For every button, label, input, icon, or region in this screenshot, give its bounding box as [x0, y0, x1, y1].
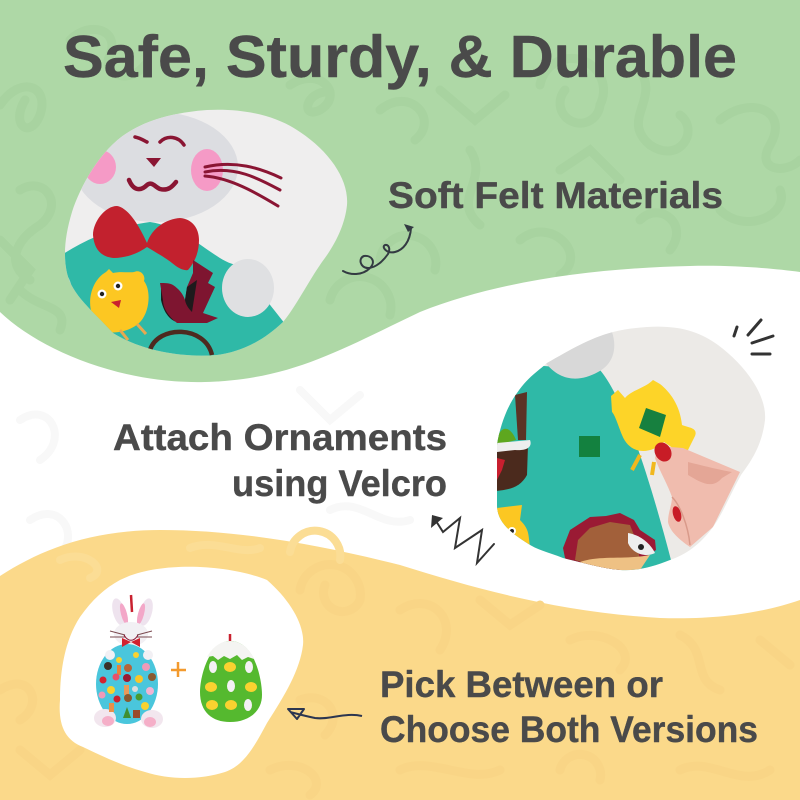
hand: [651, 439, 740, 547]
attention spark lines: [734, 320, 773, 354]
basket: [495, 392, 531, 491]
background: yellow bottom band: [0, 530, 800, 800]
navy arrow: [288, 709, 362, 719]
basket handle: [150, 332, 212, 355]
background: green top band: [0, 0, 800, 400]
zigzag arrow: [431, 515, 494, 563]
white blob: product options: [60, 567, 303, 778]
red bow tie: [93, 206, 199, 270]
pink cheeks: [84, 149, 223, 191]
teal felt egg: [490, 365, 671, 575]
title: Safe, Sturdy, & Durable: [63, 24, 737, 90]
curly arrow: [343, 224, 414, 274]
hedgehog: [563, 513, 656, 572]
teal felt body: [64, 222, 284, 356]
bunny felt version: [94, 595, 163, 728]
felt tail circle: [222, 259, 274, 317]
green velcro patch: [579, 436, 600, 457]
background: white middle wave: [0, 266, 800, 620]
photo blob: attaching the chick: [497, 326, 765, 570]
yellow chick at bottom: [497, 505, 530, 546]
plus sign: [171, 662, 186, 677]
gray felt piece: [545, 332, 614, 379]
eyes nose mouth: [129, 137, 281, 206]
green egg version: [200, 634, 262, 722]
squirrel: [160, 260, 218, 323]
bunny face: [74, 112, 238, 222]
label: using velcro: using Velcro: [232, 463, 447, 504]
label: pick between: Pick Between or: [380, 664, 663, 705]
yellow chick held up: [611, 380, 696, 475]
label: choose both: Choose Both Versions: [380, 709, 758, 750]
label: attach ornaments: Attach Ornaments: [113, 417, 447, 458]
yellow chick: [90, 269, 149, 340]
label: soft felt: Soft Felt Materials: [388, 175, 723, 216]
nose: [146, 158, 161, 167]
photo blob: felt bunny face: [65, 110, 348, 356]
